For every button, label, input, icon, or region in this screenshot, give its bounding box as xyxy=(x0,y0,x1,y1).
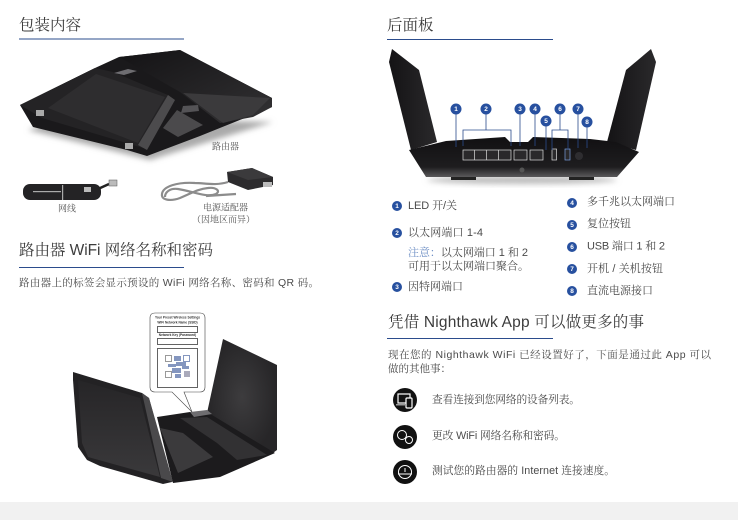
QR code xyxy=(166,356,190,378)
text: app intro: 做的其他事： xyxy=(388,362,451,375)
callout badges: 8 xyxy=(585,119,589,126)
legend: left column: 以太网端口 1-4 xyxy=(408,225,483,239)
illustration: ethernet cable xyxy=(23,180,117,200)
callout badges: 7 xyxy=(576,106,580,113)
legend: right column: 8 xyxy=(570,288,574,295)
heading: router WiFi: 路由器 WiFi 网络名称和密码 xyxy=(19,241,213,259)
callout badges: 2 xyxy=(484,106,488,113)
legend: right column: 7 xyxy=(570,266,574,273)
illustration: router back panel xyxy=(389,49,656,184)
label: router: 路由器 xyxy=(212,140,239,151)
text: app intro xyxy=(388,348,712,375)
legend: left column: 注意：以太网端口 1 和 2 xyxy=(408,245,528,259)
callout: wireless settings label: WiFi Network Name (SSID) xyxy=(157,320,198,324)
text: view devices: 查看连接到您网络的设备列表。 xyxy=(432,393,580,406)
illustration: closed router xyxy=(20,50,273,160)
callout badges: 1 xyxy=(454,106,458,113)
icon: settings xyxy=(393,425,417,449)
callout badges: 5 xyxy=(544,118,548,125)
legend: right column: 直流电源接口 xyxy=(587,283,653,297)
legend: left column: 1 xyxy=(395,203,399,210)
text: change wifi: 更改 WiFi 网络名称和密码。 xyxy=(432,429,565,442)
legend: right column: 5 xyxy=(570,222,574,229)
callout: wireless settings label: Your Preset Wireless Settings xyxy=(155,315,200,319)
legend: left column: 3 xyxy=(395,284,399,291)
legend: right column: USB 端口 1 和 2 xyxy=(587,238,665,252)
callout badges: 6 xyxy=(558,106,562,113)
callout: wireless settings label: Network Key (Password) xyxy=(159,333,196,337)
text: speed test: 测试您的路由器的 Internet 连接速度。 xyxy=(432,464,615,477)
ports xyxy=(463,149,570,160)
callout badges xyxy=(450,104,592,128)
legend: left column xyxy=(392,199,529,293)
legend: right column: 多千兆以太网端口 xyxy=(587,194,675,208)
legend: left column: 可用于以太网端口聚合。 xyxy=(408,258,529,272)
illustration: open router xyxy=(73,339,277,484)
callout: wireless settings label xyxy=(150,313,205,412)
text: app intro: 现在您的 Nighthawk WiFi 已经设置好了，下面是通过此 App 可以 xyxy=(388,348,712,361)
legend: right column: 开机 / 关机按钮 xyxy=(587,261,663,275)
legend: left column: 2 xyxy=(395,230,399,237)
legend: right column: 6 xyxy=(570,244,574,251)
legend: right column xyxy=(567,194,675,297)
label: cable: 网线 xyxy=(58,202,76,213)
icon: devices xyxy=(393,388,417,412)
heading: app: 凭借 Nighthawk App 可以做更多的事 xyxy=(388,313,644,331)
heading: back panel: 后面板 xyxy=(387,16,434,34)
label: adapter xyxy=(192,201,255,224)
footer band xyxy=(0,502,738,520)
callout lines xyxy=(456,113,587,150)
icon: speed xyxy=(393,460,417,484)
label: adapter: 电源适配器 xyxy=(203,201,248,212)
callout badges: 3 xyxy=(518,106,522,113)
legend: right column: 复位按钮 xyxy=(587,216,631,230)
legend: right column: 4 xyxy=(570,200,574,207)
heading: package contents: 包装内容 xyxy=(19,16,81,34)
callout badges: 4 xyxy=(533,106,537,113)
legend: left column: 因特网端口 xyxy=(408,279,463,293)
text: label description: 路由器上的标签会显示预设的 WiFi 网络名称、密码和 QR 码。 xyxy=(19,276,319,289)
illustration: power adapter xyxy=(162,168,273,200)
legend: left column: LED 开/关 xyxy=(408,199,457,212)
label: adapter: （因地区而异） xyxy=(192,213,255,224)
